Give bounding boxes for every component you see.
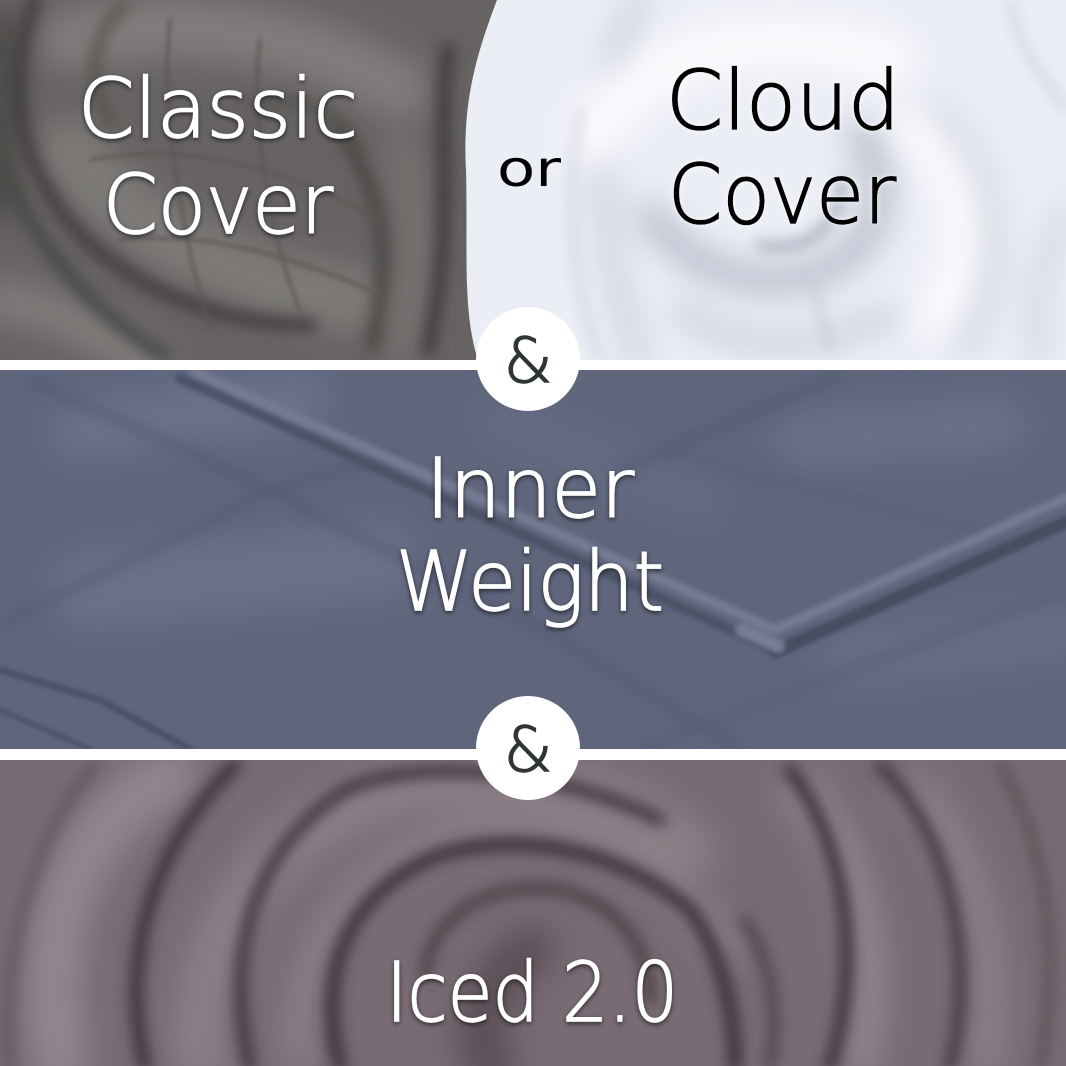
panel: cloud cover xyxy=(450,0,1066,360)
text: Classic Cover: Cover xyxy=(103,158,333,253)
divider: bottom white band xyxy=(0,749,1066,760)
text: Cloud Cover xyxy=(666,54,900,243)
badge: upper ampersand: & xyxy=(504,324,552,397)
text: Cloud Cover: Cloud xyxy=(666,54,900,149)
text: Inner Weight: Inner xyxy=(426,442,634,537)
panel: classic cover xyxy=(0,0,500,370)
text: Inner Weight: Weight xyxy=(396,535,664,630)
badge: lower ampersand: & xyxy=(504,713,552,786)
text: Inner Weight xyxy=(396,442,664,630)
label: or: or xyxy=(497,140,562,198)
panel: iced 2.0 xyxy=(0,760,1066,1066)
text: Classic Cover xyxy=(78,62,358,253)
text: Iced 2.0: Iced 2.0 xyxy=(386,946,678,1041)
text: Cloud Cover: Cover xyxy=(668,148,896,243)
text: Classic Cover: Classic xyxy=(78,62,358,157)
panel: inner weight xyxy=(0,370,1066,749)
badge: lower ampersand xyxy=(476,696,580,800)
divider: top white band xyxy=(0,360,1066,370)
badge: upper ampersand xyxy=(476,307,580,411)
